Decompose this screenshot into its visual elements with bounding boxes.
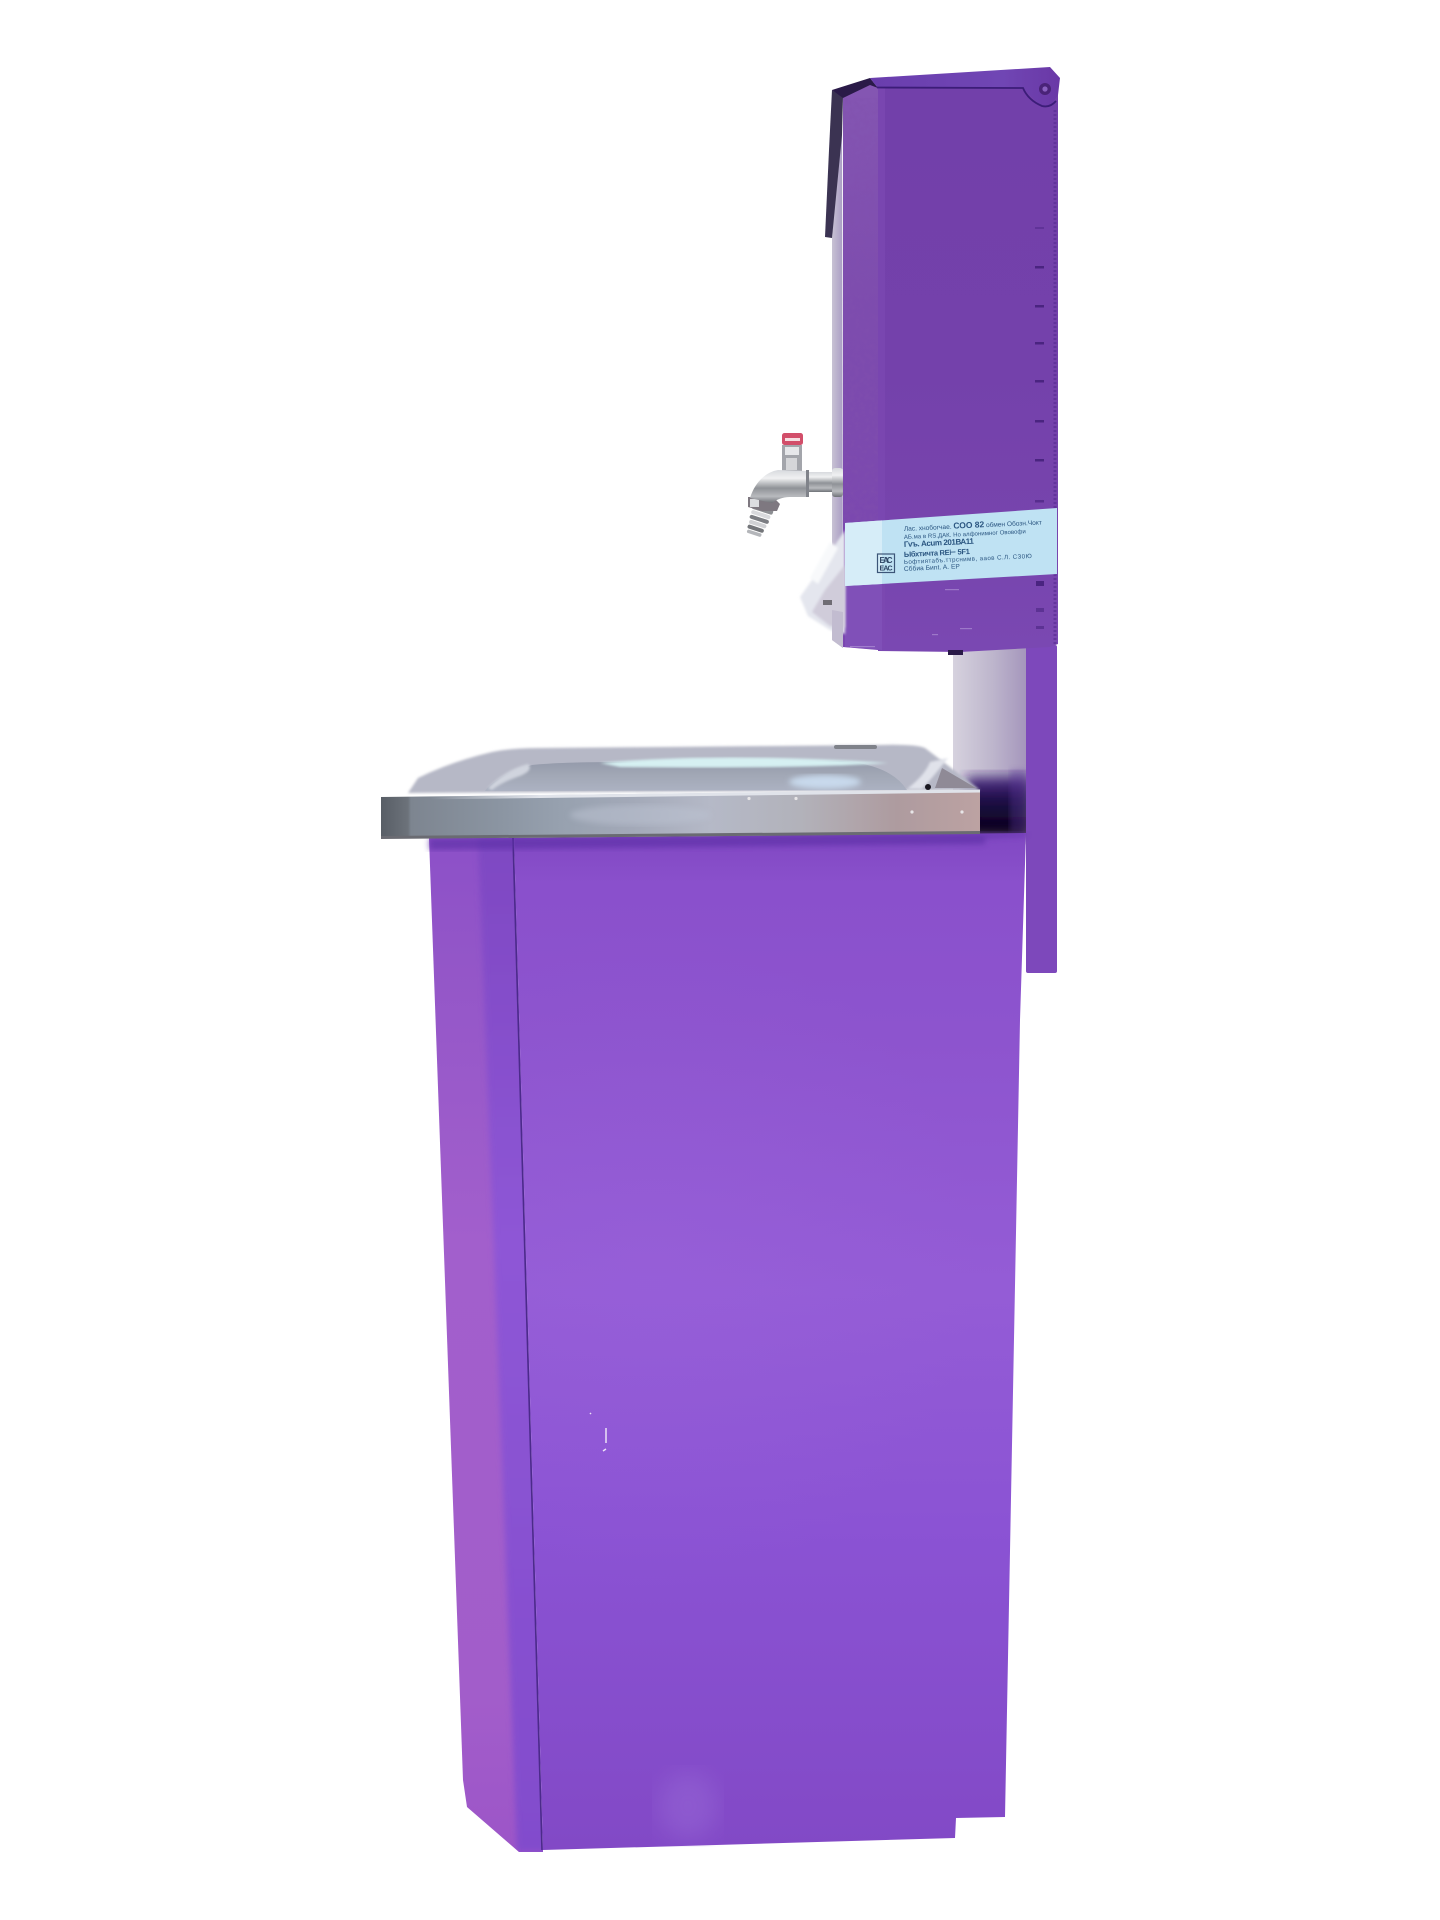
stainless steel sink xyxy=(381,745,980,839)
label: EAC certification mark: ЕАС xyxy=(880,566,892,572)
water tap xyxy=(744,433,843,538)
label: text lines xyxy=(904,517,1042,573)
tank: textured side panel xyxy=(843,83,878,650)
tank: hinge screw xyxy=(1039,83,1051,95)
label: text lines: АБ.ма в RS.ДАК. Но алфонимног Ововофи xyxy=(904,529,1026,541)
sink: basin highlight xyxy=(600,758,888,768)
tank: top edge xyxy=(870,67,1060,107)
plastic wrap behind label xyxy=(800,530,845,648)
label: text lines: Ыбхтичта RE⊢ 5F1 xyxy=(904,547,970,559)
cabinet: front door xyxy=(514,833,1026,1850)
tank: dark lid flap xyxy=(825,90,843,238)
sink: top surface xyxy=(408,745,980,793)
label: EAC certification mark: ЕАС xyxy=(880,556,893,565)
tap: nut xyxy=(748,497,780,511)
sink: corner detail xyxy=(935,768,976,788)
label: text lines: Лас. хнобогчае. СОО 82 обмен Обозн.Чокт xyxy=(904,517,1042,533)
tank: front panel xyxy=(878,87,1058,652)
tap: body and spout xyxy=(750,470,808,503)
label: EAC certification mark xyxy=(878,554,894,572)
product illustration: washstand xyxy=(381,67,1060,1852)
tank: perforated right edge xyxy=(1054,110,1056,644)
purple cabinet base xyxy=(429,833,1026,1852)
tank: dark ridge xyxy=(832,78,878,98)
tank: gray side panel xyxy=(832,100,843,648)
tank: scale tick marks xyxy=(1035,227,1044,629)
tap: pipe and flange xyxy=(808,472,834,492)
label: text lines: Сббиа Биnt. A. ЕР xyxy=(904,562,961,573)
cabinet: door seam xyxy=(513,838,542,1850)
cabinet: small white marks xyxy=(590,1413,606,1451)
tank: small scuffs xyxy=(850,589,972,647)
label: text lines: Ьофтиятабъ.ттрснимв, ааов С.Л. СЗ0Ю xyxy=(904,553,1032,566)
rear post and purple back strip xyxy=(953,645,1057,973)
product label on tank xyxy=(845,508,1057,586)
cabinet: side strip xyxy=(479,846,543,1852)
tap: threaded nozzle xyxy=(744,504,774,538)
cabinet: light reflection xyxy=(658,1772,718,1840)
tap: stem xyxy=(782,445,802,472)
tank: bottom knob xyxy=(948,650,963,655)
sink: basin xyxy=(485,761,907,791)
cabinet: shadow under sink xyxy=(429,833,1026,850)
sink: front rim xyxy=(381,790,980,838)
cabinet: side panel xyxy=(429,838,543,1852)
label: text lines: Гvъ. Acum 201ВА11 xyxy=(904,537,975,549)
sink: rivets xyxy=(747,797,964,814)
water tank xyxy=(825,67,1060,655)
tap: red handle xyxy=(782,433,803,445)
sink: drain hole xyxy=(834,745,877,749)
